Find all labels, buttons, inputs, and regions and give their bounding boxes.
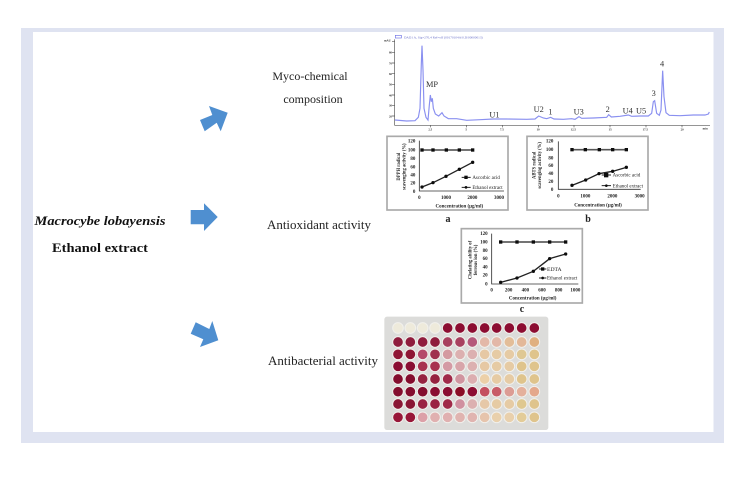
y-axis numbers: 80	[548, 156, 554, 161]
axis numbers: 12.5	[571, 128, 576, 132]
axes	[395, 39, 710, 125]
y-axis numbers: 100	[480, 241, 488, 246]
y-axis numbers: 40	[410, 174, 416, 179]
y-axis numbers: 20	[410, 182, 416, 187]
y-axis numbers: 120	[408, 140, 416, 145]
chart b: ABTS: scavenging activity (%)	[538, 142, 543, 189]
axis numbers: min	[703, 126, 708, 130]
title: species name: Macrocybe lobayensis	[33, 213, 166, 228]
axis numbers: 50	[389, 83, 392, 87]
axis numbers: 2.5	[428, 128, 433, 132]
x-axis numbers: 3000	[494, 196, 504, 201]
y-axis numbers	[546, 140, 554, 193]
x-axis numbers: 3000	[635, 195, 645, 200]
x-axis numbers: 200	[505, 288, 513, 293]
chart a: DPPH: Ethanol extract	[472, 186, 503, 191]
row 8	[393, 412, 540, 423]
y-axis numbers	[480, 232, 488, 287]
chart: chromatogram	[384, 35, 710, 132]
y-axis title: DPPH radical	[397, 152, 402, 181]
series: ethanol extract	[501, 254, 566, 282]
x-axis numbers: 1000	[570, 288, 581, 293]
y-axis numbers: 40	[548, 172, 554, 177]
x-axis numbers	[557, 195, 645, 200]
axis numbers: 40	[389, 93, 392, 97]
x-axis numbers: 600	[538, 288, 546, 293]
axis numbers: 10	[537, 128, 540, 132]
chart a: DPPH: Ascorbic acid	[472, 176, 500, 181]
y-axis numbers: 80	[410, 157, 416, 162]
axis numbers: 17.5	[643, 128, 648, 132]
y-axis numbers: 20	[483, 274, 488, 279]
peak labels: 4	[660, 59, 665, 68]
y-axis numbers: 40	[483, 265, 488, 270]
x-axis numbers: 1000	[580, 195, 591, 200]
subtitle: extract: Ethanol extract	[52, 240, 149, 255]
y-axis numbers: 0	[485, 282, 488, 287]
panel letter b: b	[585, 214, 591, 225]
label: myco-chemical composition: Myco-chemical	[272, 69, 348, 83]
axis numbers: 20	[681, 128, 684, 132]
peak labels: U3	[574, 108, 584, 117]
peak labels: 3	[652, 89, 656, 98]
x-axis title: Concentration (µg/ml)	[436, 205, 483, 210]
y-axis numbers: 80	[483, 249, 488, 254]
row 4	[393, 361, 540, 372]
axis numbers: 15	[609, 128, 612, 132]
x-axis numbers: 2000	[467, 196, 478, 201]
series: ethanol extract	[572, 167, 626, 185]
x-axis numbers: 800	[555, 288, 563, 293]
y-axis numbers: 60	[548, 164, 554, 169]
chart c: chelating: Ethanol extract	[547, 277, 578, 282]
axis numbers: 20	[389, 114, 392, 118]
panel: frame	[21, 28, 724, 443]
peak labels: U5	[636, 106, 646, 115]
x-axis numbers	[418, 196, 504, 201]
y-axis numbers: 100	[408, 148, 416, 153]
y-axis numbers	[408, 140, 416, 195]
legend	[462, 177, 471, 187]
chart b: ABTS: Ethanol extract	[613, 184, 644, 189]
y-axis numbers: 20	[548, 180, 554, 185]
x-axis numbers: 0	[490, 288, 493, 293]
series: ethanol extract	[422, 162, 473, 187]
peak labels: U2	[534, 105, 544, 114]
chart c: chelating: EDTA	[547, 267, 563, 273]
y-axis numbers: 0	[551, 188, 554, 193]
x-axis title: Concentration (µg/ml)	[509, 296, 557, 301]
row 1	[393, 323, 540, 333]
x-axis numbers: 2000	[607, 195, 618, 200]
peak labels: U4	[623, 106, 634, 115]
peak labels: 2	[606, 105, 610, 114]
peak labels: MP	[426, 80, 438, 89]
arrow: to composition	[200, 106, 228, 131]
axis numbers: 60	[389, 72, 392, 76]
legend	[539, 269, 546, 278]
x-axis numbers: 1000	[441, 196, 451, 201]
peak labels: 1	[548, 108, 553, 117]
axis numbers: 7.5	[500, 128, 504, 132]
chart a: DPPH: scavenging activity (%)	[402, 143, 407, 190]
image: 96-well plate	[384, 317, 548, 430]
series: EDTA	[501, 240, 566, 244]
arrow: to antibacterial	[191, 321, 218, 347]
x-axis numbers	[490, 288, 581, 293]
y-axis numbers: 60	[410, 165, 416, 170]
row 3	[393, 349, 540, 360]
peak labels	[426, 59, 665, 119]
legend	[602, 175, 611, 186]
axis numbers: 30	[389, 104, 392, 108]
row 7	[393, 399, 540, 409]
chart b: ABTS: Ascorbic acid	[613, 174, 641, 179]
x-axis numbers: 0	[557, 195, 560, 200]
arrow: to antioxidant	[191, 203, 218, 231]
y-axis numbers: 60	[483, 257, 488, 262]
chromatogram trace	[395, 46, 709, 121]
chart b: ABTS	[527, 136, 648, 210]
series: ascorbic acid	[422, 148, 473, 152]
x-axis title: Concentration (µg/ml)	[574, 204, 622, 209]
axis numbers: 80	[389, 51, 392, 55]
chart legend text: DAD1 A, Sig=270,4 Ref=off (00170104A/0.D/00000013)	[404, 35, 483, 40]
panel letter c: c	[520, 304, 525, 315]
row 5	[393, 374, 540, 384]
label: myco-chemical composition: composition	[283, 92, 343, 106]
peak labels: U1	[489, 110, 500, 119]
axis numbers: mAU	[384, 38, 392, 42]
row 6	[393, 386, 540, 397]
row 2	[393, 337, 540, 347]
axis numbers	[384, 38, 708, 132]
label: antioxidant activity: Antioxidant activity	[267, 218, 372, 232]
y-axis numbers: 0	[413, 190, 416, 195]
y-axis title: Chelating ability of	[468, 240, 473, 279]
y-axis title: ABTS radical	[533, 151, 538, 179]
axis numbers: 70	[389, 61, 392, 65]
axis numbers: 5	[465, 128, 467, 132]
y-axis numbers: 100	[546, 148, 554, 153]
y-axis numbers: 120	[546, 140, 554, 145]
chart c: chelating	[461, 229, 582, 303]
series: ascorbic acid	[572, 147, 626, 152]
x-axis numbers: 0	[418, 196, 421, 201]
chart c: chelating: ferrous ion (%)	[474, 244, 479, 275]
chart a: DPPH	[387, 136, 508, 210]
x-axis numbers: 400	[522, 288, 530, 293]
label: antibacterial activity: Antibacterial activity	[268, 354, 379, 368]
y-axis numbers: 120	[480, 232, 488, 237]
panel letter a: a	[446, 214, 450, 225]
